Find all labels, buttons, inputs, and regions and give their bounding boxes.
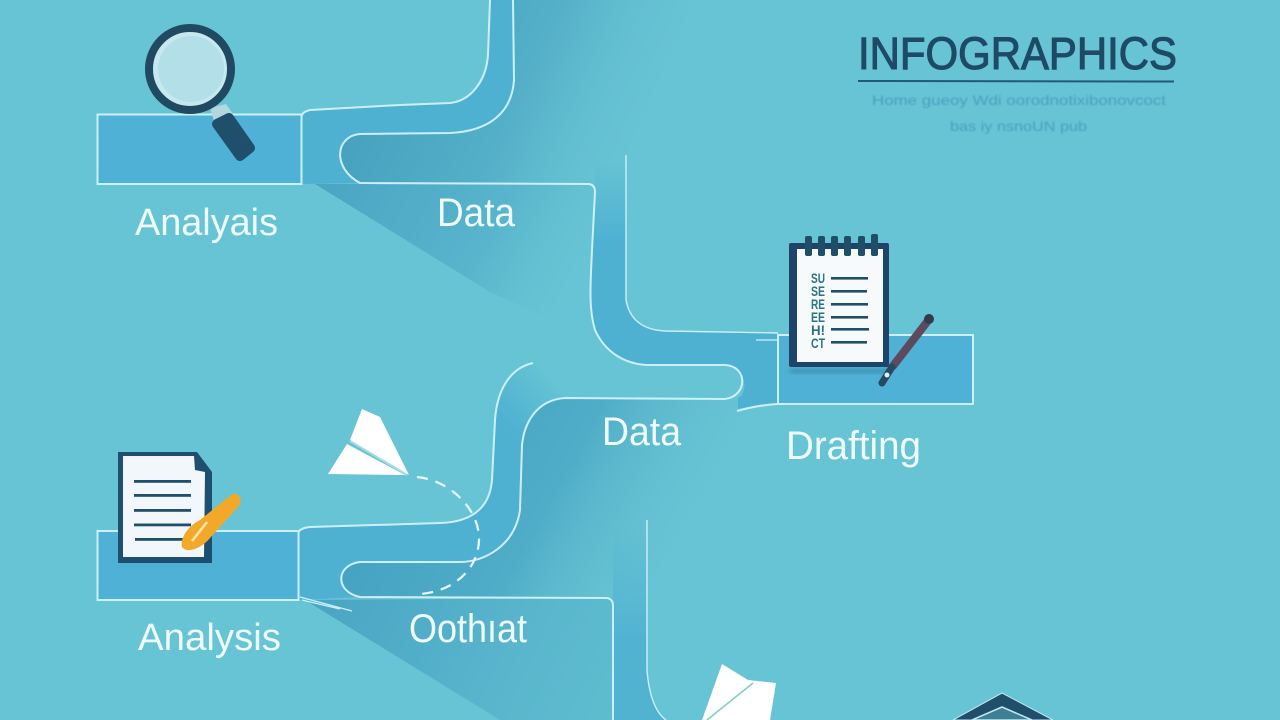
label: Data top: Data [437, 191, 516, 235]
panel: analysis box bottom [98, 531, 298, 600]
icon: paper plane cut off at bottom [702, 664, 776, 720]
panel: analysis box top [98, 114, 302, 184]
flow ribbon fills [298, 0, 778, 720]
icon: magnifying glass [149, 28, 250, 156]
label: Data middle: Data [602, 410, 682, 454]
icon: notepad with pencil: SE [811, 283, 825, 299]
subtitle line 2: bas iy nsnoUN pub [950, 118, 1087, 134]
dashed flight path [417, 477, 479, 594]
title: INFOGRAPHICS [858, 28, 1177, 79]
icon: notepad with pencil: CT [811, 335, 825, 351]
icon: hexagon cut off at bottom [953, 693, 1053, 720]
icon: notepad with pencil [789, 234, 934, 383]
label: Analysis: Analysis [138, 617, 281, 659]
label: Oothiat: Oothıat [409, 607, 527, 651]
icon: notepad with pencil: EE [811, 309, 825, 325]
subtitle line 1: Home gueoy Wdi oorodnotixibonovcoct [872, 92, 1166, 108]
title underline [858, 80, 1174, 82]
icon: document with orange pen [118, 452, 241, 563]
label: Drafting: Drafting [786, 424, 921, 468]
icon: notepad with pencil: H! [811, 322, 825, 338]
icon: notepad with pencil: RE [811, 296, 825, 312]
ribbon shadows [305, 0, 780, 720]
icon: notepad with pencil: SU [811, 270, 825, 286]
panel: drafting box [778, 335, 973, 404]
label: Analyais: Analyais [135, 202, 278, 244]
flow ribbon outlines [298, 0, 788, 720]
icon: paper plane [328, 409, 409, 475]
